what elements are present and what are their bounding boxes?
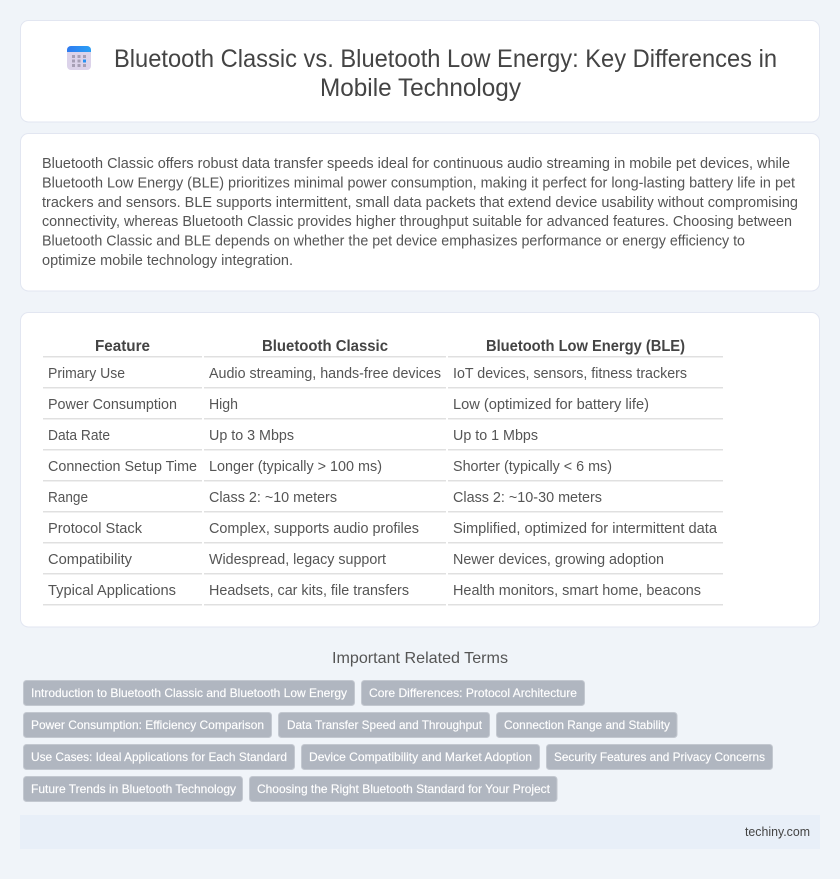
panel: introduction <box>20 134 820 291</box>
table header: Bluetooth Classic <box>262 338 388 355</box>
tag <box>546 744 772 770</box>
tag: Introduction to Bluetooth Classic and Bluetooth Low Energy <box>31 686 347 700</box>
tag <box>24 680 354 706</box>
row: connection setup time: Shorter (typically < 6 ms) <box>453 459 612 475</box>
row: typical applications: Headsets, car kits, file transfers <box>209 583 409 599</box>
row: data rate <box>48 428 538 444</box>
footer <box>20 815 820 849</box>
row: compatibility: Newer devices, growing adoption <box>453 552 664 568</box>
footer credit: techiny.com <box>745 824 810 839</box>
intro text block <box>42 156 798 269</box>
tag: Data Transfer Speed and Throughput <box>287 718 483 732</box>
intro text block: trackers and sensors. BLE supports intermittent, small data packets that extend device usability without compromising <box>42 195 798 211</box>
row: data rate: Data Rate <box>48 428 110 444</box>
row: primary use <box>48 366 687 382</box>
intro text block: optimize mobile technology integration. <box>42 253 293 269</box>
row: protocol stack: Protocol Stack <box>48 521 143 537</box>
title: Bluetooth Classic vs. Bluetooth Low Energy: Key Differences in <box>114 45 777 73</box>
tag <box>24 744 294 770</box>
row: connection setup time <box>48 459 612 475</box>
tag: Future Trends in Bluetooth Technology <box>31 782 236 796</box>
icon: calendar <box>67 46 91 70</box>
row: compatibility <box>48 552 664 568</box>
table header <box>95 338 685 355</box>
tag: Choosing the Right Bluetooth Standard for Your Project <box>257 782 551 796</box>
row: connection setup time: Connection Setup Time <box>48 459 197 475</box>
heading: important related terms: Important Related Terms <box>332 650 508 667</box>
row: connection setup time: Longer (typically > 100 ms) <box>209 459 382 475</box>
row: compatibility: Compatibility <box>48 552 133 568</box>
row: typical applications: Typical Applications <box>48 583 176 599</box>
row: protocol stack: Complex, supports audio profiles <box>209 521 419 537</box>
row: data rate: Up to 1 Mbps <box>453 428 538 444</box>
row: range: Range <box>48 490 88 506</box>
row: power consumption: Low (optimized for battery life) <box>453 397 649 413</box>
tag: Use Cases: Ideal Applications for Each Standard <box>31 750 287 764</box>
tag: Connection Range and Stability <box>504 718 670 732</box>
intro text block: Bluetooth Classic offers robust data transfer speeds ideal for continuous audio streaming in mobile pet devices, while <box>42 156 790 172</box>
tag <box>362 680 584 706</box>
row: primary use: Audio streaming, hands-free devices <box>209 366 441 382</box>
row: typical applications <box>48 583 701 599</box>
related terms tags <box>24 680 772 802</box>
row: typical applications: Health monitors, smart home, beacons <box>453 583 701 599</box>
row: protocol stack: Simplified, optimized for intermittent data <box>453 521 717 537</box>
tag: Security Features and Privacy Concerns <box>554 750 765 764</box>
intro text block: connectivity, whereas Bluetooth Classic provides higher throughput suitable for advanced features. Choosing between <box>42 214 792 230</box>
title: Mobile Technology <box>320 74 521 102</box>
tag: Device Compatibility and Market Adoption <box>309 750 532 764</box>
row: range <box>48 490 602 506</box>
intro text block: Bluetooth Classic and BLE depends on whether the pet device emphasizes performance or energy efficiency to <box>42 234 745 250</box>
tag <box>302 744 540 770</box>
row: range: Class 2: ~10-30 meters <box>453 490 602 506</box>
tag <box>278 712 490 738</box>
tag: Core Differences: Protocol Architecture <box>369 686 577 700</box>
tag <box>24 712 272 738</box>
row: power consumption: Power Consumption <box>48 397 177 413</box>
row: protocol stack <box>48 521 717 537</box>
tag <box>250 776 557 802</box>
title <box>114 45 777 102</box>
table header: Feature <box>95 338 150 355</box>
table header: Bluetooth Low Energy (BLE) <box>486 338 685 355</box>
panel: comparison table <box>20 312 820 627</box>
intro text block: Bluetooth Low Energy (BLE) prioritizes minimal power consumption, making it perfect for long-lasting battery life in pet <box>42 175 795 191</box>
row: power consumption <box>48 397 649 413</box>
tag <box>496 712 677 738</box>
row: power consumption: High <box>209 397 238 413</box>
row: range: Class 2: ~10 meters <box>209 490 337 506</box>
row: compatibility: Widespread, legacy support <box>209 552 386 568</box>
row: primary use: Primary Use <box>48 366 125 382</box>
row: data rate: Up to 3 Mbps <box>209 428 294 444</box>
tag <box>24 776 242 802</box>
row: primary use: IoT devices, sensors, fitness trackers <box>453 366 687 382</box>
header panel <box>20 20 820 122</box>
tag: Power Consumption: Efficiency Comparison <box>31 718 264 732</box>
